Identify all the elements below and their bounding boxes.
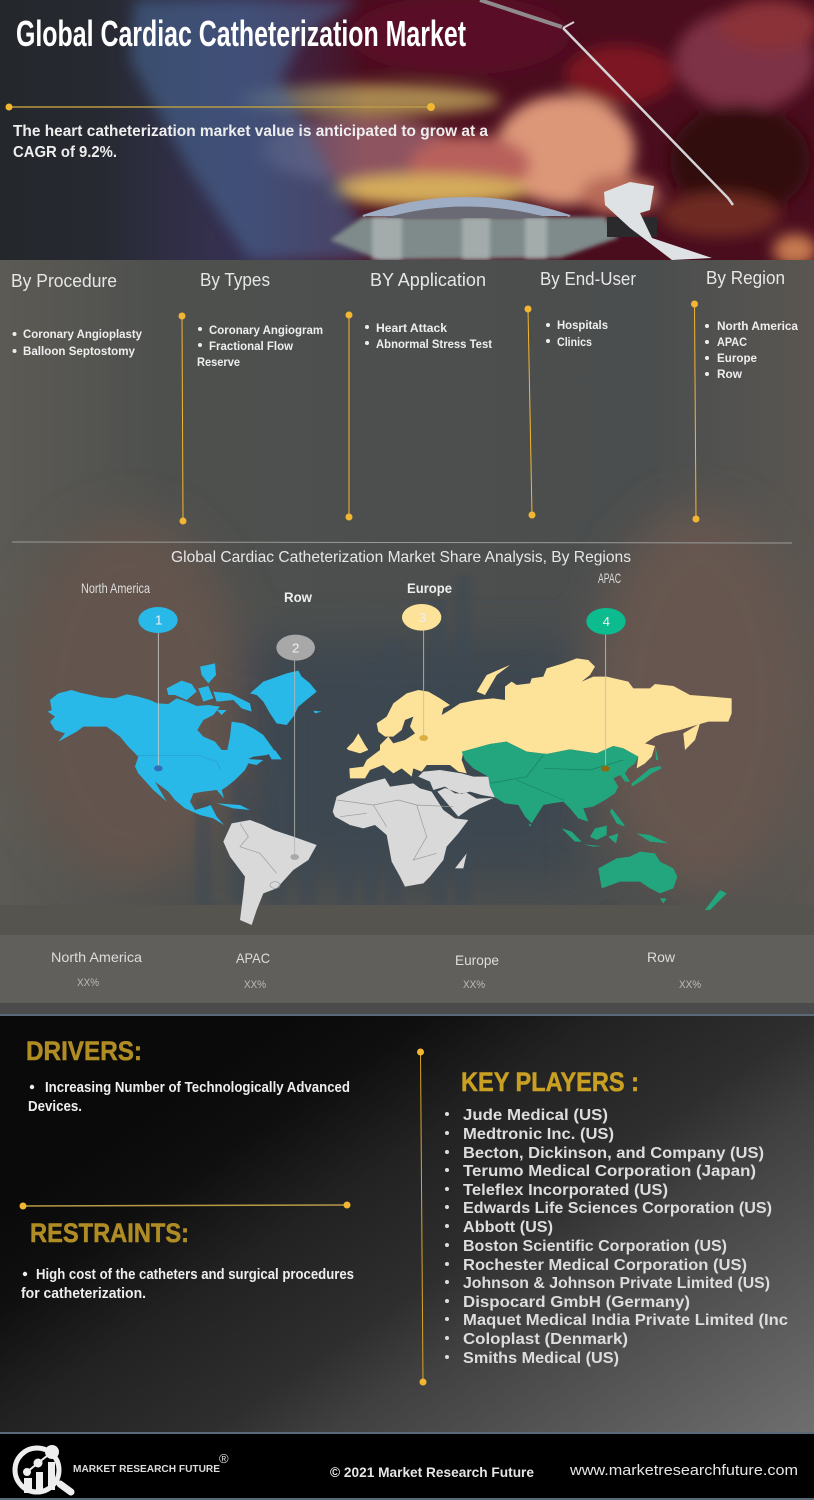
list: by end-user: Clinics [557,335,592,349]
text block: CAGR statement: The heart catheterization market value is anticipated to grow at a [13,123,488,140]
pin 3: 3 [419,610,426,625]
list: by region [705,319,798,381]
list: key players: Smiths Medical (US) [463,1350,619,1367]
copyright: © 2021 Market Research Future [330,1464,534,1480]
list: key players: Medtronic Inc. (US) [463,1126,614,1143]
pin 2: 2 [292,640,299,655]
text: driver item: Increasing Number of Technologically Advanced [45,1080,350,1096]
section headings: By End-User [540,269,636,289]
chart heading: Global Cardiac Catheterization Market Share Analysis, By Regions [171,549,631,566]
text: restraint item: for catheterization. [21,1286,146,1302]
list: key players: Rochester Medical Corporation (US) [463,1257,747,1274]
value: Europe [455,952,499,991]
pin 4 [586,608,626,772]
logo: market research future: ® [219,1451,229,1466]
list: by end-user [546,318,608,349]
list: key players [445,1107,788,1367]
band: share values [0,935,814,1014]
region labels: North America [81,580,150,596]
text: driver item: Devices. [28,1099,82,1115]
section headings [11,268,785,291]
website: www.marketresearchfuture.com [569,1462,798,1479]
divider: header rule with dots [6,103,435,111]
list: by procedure [12,327,142,358]
value: Row: XX% [679,979,701,991]
list: key players: Boston Scientific Corporation (US) [463,1238,727,1255]
list: by procedure: Coronary Angioplasty [23,327,142,341]
value: North America: XX% [77,977,99,989]
logo: market research future: MARKET RESEARCH FUTURE [73,1464,220,1475]
region labels: APAC [598,570,621,586]
pin 1 [138,607,178,771]
list: by region: Europe [717,351,757,365]
list: by end-user: Hospitals [557,318,608,332]
text: driver item [28,1080,350,1115]
heading: key players: KEY PLAYERS : [461,1067,639,1097]
pin 1: 1 [155,613,162,628]
list: key players: Johnson & Johnson Private Limited (US) [463,1275,770,1292]
region labels: Europe [407,581,452,596]
divider: restraints rule [20,1202,350,1210]
section headings: By Types [200,270,270,290]
list: key players: Teleflex Incorporated (US) [463,1182,668,1199]
list: key players: Coloplast (Denmark) [463,1331,628,1348]
list: by application: Heart Attack [376,321,447,335]
value: Row [647,949,701,991]
list: by types [197,323,323,369]
text: restraint item [21,1267,354,1302]
list: by application [365,321,492,351]
text block: CAGR statement [13,123,488,161]
list: by types: Fractional Flow [209,339,294,353]
region labels [81,570,621,605]
panel: header photo [0,0,814,266]
value: Europe: XX% [463,979,485,991]
text block: CAGR statement: CAGR of 9.2%. [13,144,117,161]
section headings: BY Application [370,270,486,290]
list: by types: Coronary Angiogram [209,323,323,337]
divider: key players rule [417,1048,426,1386]
section headings: By Region [706,268,785,288]
map: eurasia, africa, oceania [333,604,732,910]
section headings: By Procedure [11,271,117,291]
list: key players: Abbott (US) [463,1219,553,1236]
column separators [178,300,700,524]
list: key players: Dispocard GmbH (Germany) [463,1294,690,1311]
list: key players: Becton, Dickinson, and Company (US) [463,1145,764,1162]
panel: segmentation and map background [0,260,814,935]
region labels: Row [284,590,312,605]
list: by region: APAC [717,335,747,349]
list: by procedure: Balloon Septostomy [23,344,135,358]
value: North America: North America [51,949,142,965]
footer bar [0,1434,814,1500]
list: key players: Jude Medical (US) [463,1107,608,1124]
list: by types: Reserve [197,355,240,369]
pin 3 [402,604,441,741]
value: Row: Row [647,949,676,965]
map: americas [48,607,322,925]
world map [48,604,732,925]
panel: drivers, restraints and key players [0,1014,814,1434]
list: key players: Maquet Medical India Private Limited (Inc [463,1312,788,1329]
heading: drivers: DRIVERS: [26,1036,142,1066]
value: APAC [236,950,270,991]
heading: restraints: RESTRAINTS: [30,1218,189,1248]
list: by region: Row [717,367,743,381]
list: key players: Edwards Life Sciences Corporation (US) [463,1200,772,1217]
logo: market research future [15,1445,229,1493]
text: restraint item: High cost of the catheters and surgical procedures [36,1267,354,1283]
pin 2 [276,635,315,860]
title: Global Cardiac Catheterization Market [16,13,466,54]
list: key players: Terumo Medical Corporation (Japan) [463,1163,756,1180]
value: APAC: XX% [244,979,266,991]
value: APAC: APAC [236,950,270,966]
value: Europe: Europe [455,952,499,968]
list: by region: North America [717,319,798,333]
value: North America [51,949,142,989]
list: by application: Abnormal Stress Test [376,337,492,351]
pin 4: 4 [603,614,611,629]
